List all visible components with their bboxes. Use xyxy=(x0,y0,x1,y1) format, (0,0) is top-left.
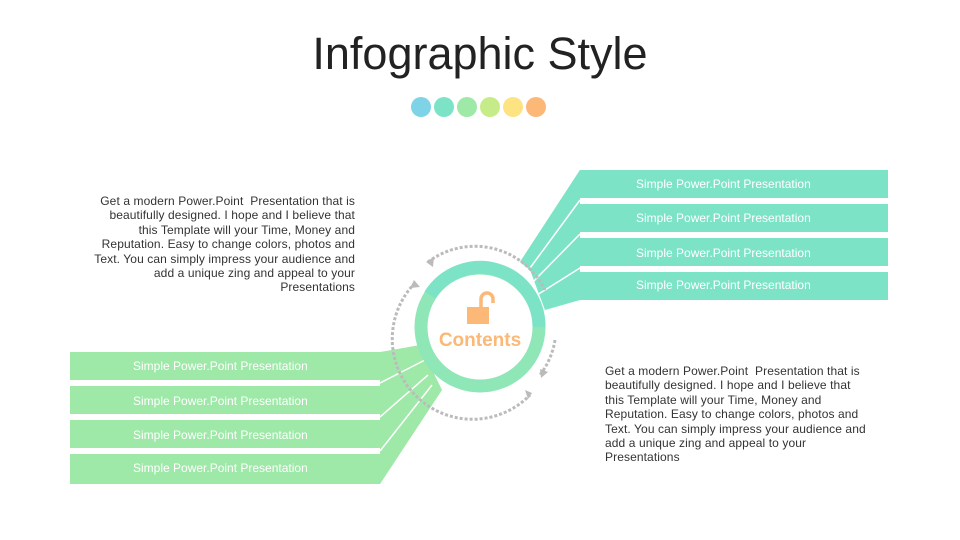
dotted arcs xyxy=(392,246,555,419)
lower green bands xyxy=(70,345,442,484)
top band labels: Simple Power.Point Presentation xyxy=(636,177,811,191)
contents label: Contents xyxy=(439,330,521,351)
lower band labels: Simple Power.Point Presentation xyxy=(133,461,308,475)
title: Infographic Style xyxy=(312,28,648,79)
lower band labels xyxy=(133,359,308,475)
ring xyxy=(421,268,539,386)
top teal bands xyxy=(520,170,888,310)
top band labels: Simple Power.Point Presentation xyxy=(636,278,811,292)
lower band labels: Simple Power.Point Presentation xyxy=(133,359,308,373)
lower band labels: Simple Power.Point Presentation xyxy=(133,394,308,408)
top band labels xyxy=(636,177,811,292)
text block right: Get a modern Power.Point Presentation that is beautifully designed. I hope and I believe that this Template will your Time, Money and Reputation. Easy to change colors, photos and Text. You can simply impress your audience and add a unique zing and appeal to your Presentations xyxy=(605,364,866,464)
text block left: Get a modern Power.Point Presentation that is beautifully designed. I hope and I believe that this Template will your Time, Money and Reputation. Easy to change colors, photos and Text. You can simply impress your audience and add a unique zing and appeal to your Presentations xyxy=(94,194,355,294)
top band labels: Simple Power.Point Presentation xyxy=(636,246,811,260)
color dots xyxy=(411,97,546,117)
top band labels: Simple Power.Point Presentation xyxy=(636,211,811,225)
lower band labels: Simple Power.Point Presentation xyxy=(133,428,308,442)
icon: lock xyxy=(467,293,493,324)
